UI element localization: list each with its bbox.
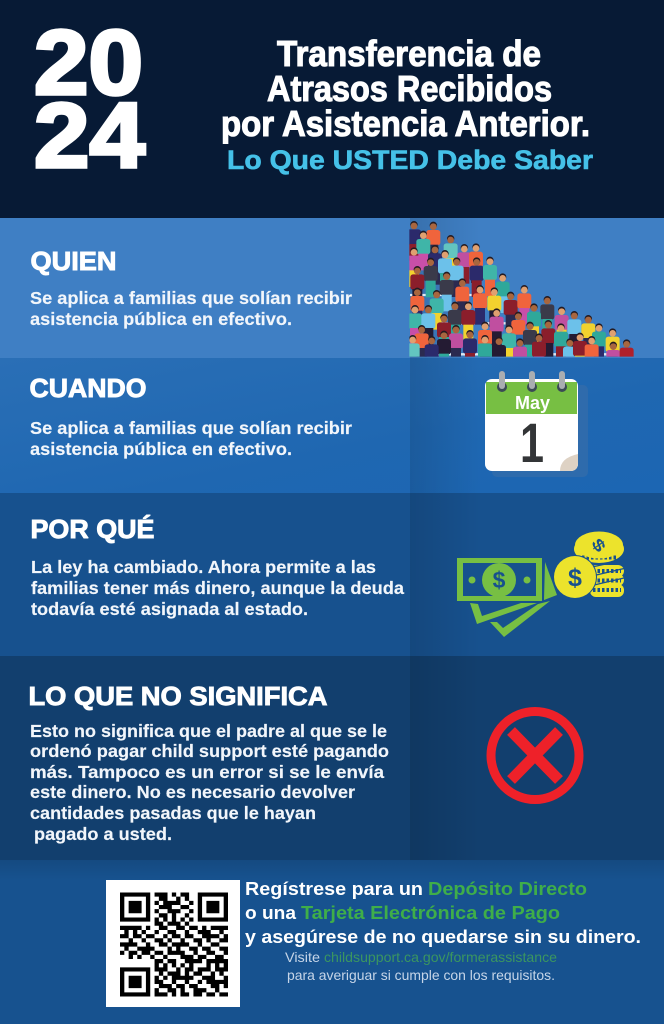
panel: cuando xyxy=(0,358,664,493)
icon: calendar xyxy=(485,371,588,477)
website note: Visite xyxy=(285,949,320,965)
text: quien: Se aplica a familias que solían recibir xyxy=(30,288,352,308)
registration message: Regístrese para un xyxy=(245,879,423,899)
text: cuando: asistencia pública en efectivo. xyxy=(30,439,292,459)
website note xyxy=(285,949,557,983)
year 2024: 20 xyxy=(34,12,143,114)
title: por Asistencia Anterior. xyxy=(221,103,590,144)
text: lo que no significa: este dinero. No es necesario devolver xyxy=(30,782,355,802)
text: cuando: Se aplica a familias que solían recibir xyxy=(30,418,352,438)
registration message: y asegúrese de no quedarse sin su dinero. xyxy=(245,927,641,947)
coin stack xyxy=(574,532,624,597)
header panel xyxy=(0,0,664,218)
panel: registration footer xyxy=(0,860,664,1024)
registration message: Tarjeta Electrónica de Pago xyxy=(301,903,560,923)
panel: quien xyxy=(0,218,664,358)
year 2024: 24 xyxy=(34,85,145,187)
registration message: Depósito Directo xyxy=(428,879,587,899)
registration message xyxy=(245,879,641,947)
icon: money and coins xyxy=(457,532,624,637)
title: Transferencia de xyxy=(277,33,541,74)
panel: lo que no significa xyxy=(0,656,664,860)
icon: money and coins: $ xyxy=(587,536,609,556)
title xyxy=(221,33,590,144)
text: lo que no significa: cantidades pasadas que le hayan xyxy=(30,803,316,823)
icon: calendar: 1 xyxy=(520,411,544,474)
text: lo que no significa: ordenó pagar child support esté pagando xyxy=(30,741,389,761)
title: Atrasos Recibidos xyxy=(267,68,552,109)
website note: childsupport.ca.gov/formerassistance xyxy=(324,949,557,965)
icon: crowd of people xyxy=(409,221,634,357)
text: por que: todavía esté asignada al estado. xyxy=(31,599,308,619)
qr code xyxy=(106,880,240,1007)
subtitle: Lo Que USTED Debe Saber xyxy=(227,145,594,175)
icon: red x in circle xyxy=(491,712,579,800)
text: lo que no significa: pagado a usted. xyxy=(34,824,172,844)
heading: cuando: CUANDO xyxy=(30,373,146,403)
text: quien: asistencia pública en efectivo. xyxy=(30,309,292,329)
text: lo que no significa: más. Tampoco es un error si se le envía xyxy=(30,762,384,782)
icon: calendar: May xyxy=(515,393,550,413)
heading: lo que no significa: LO QUE NO SIGNIFICA xyxy=(28,681,328,711)
heading: quien: QUIEN xyxy=(30,246,116,276)
text: lo que no significa: Esto no significa que el padre al que se le xyxy=(30,721,387,741)
text: por que: familias tener más dinero, aunque la deuda xyxy=(31,578,404,598)
registration message: o una xyxy=(245,903,297,923)
text: lo que no significa xyxy=(30,721,389,844)
text: quien xyxy=(30,288,352,329)
front bill xyxy=(457,558,542,601)
text: por que xyxy=(31,557,404,619)
heading: por que: POR QUÉ xyxy=(30,514,154,544)
text: cuando xyxy=(30,418,352,459)
icon: money and coins: $ xyxy=(568,564,582,592)
icon: money and coins: $ xyxy=(493,567,506,593)
website note: para averiguar si cumple con los requisitos. xyxy=(287,967,555,983)
back bills xyxy=(470,601,550,637)
panel: por que xyxy=(0,493,664,656)
text: por que: La ley ha cambiado. Ahora permite a las xyxy=(31,557,376,577)
year 2024 xyxy=(34,12,145,187)
